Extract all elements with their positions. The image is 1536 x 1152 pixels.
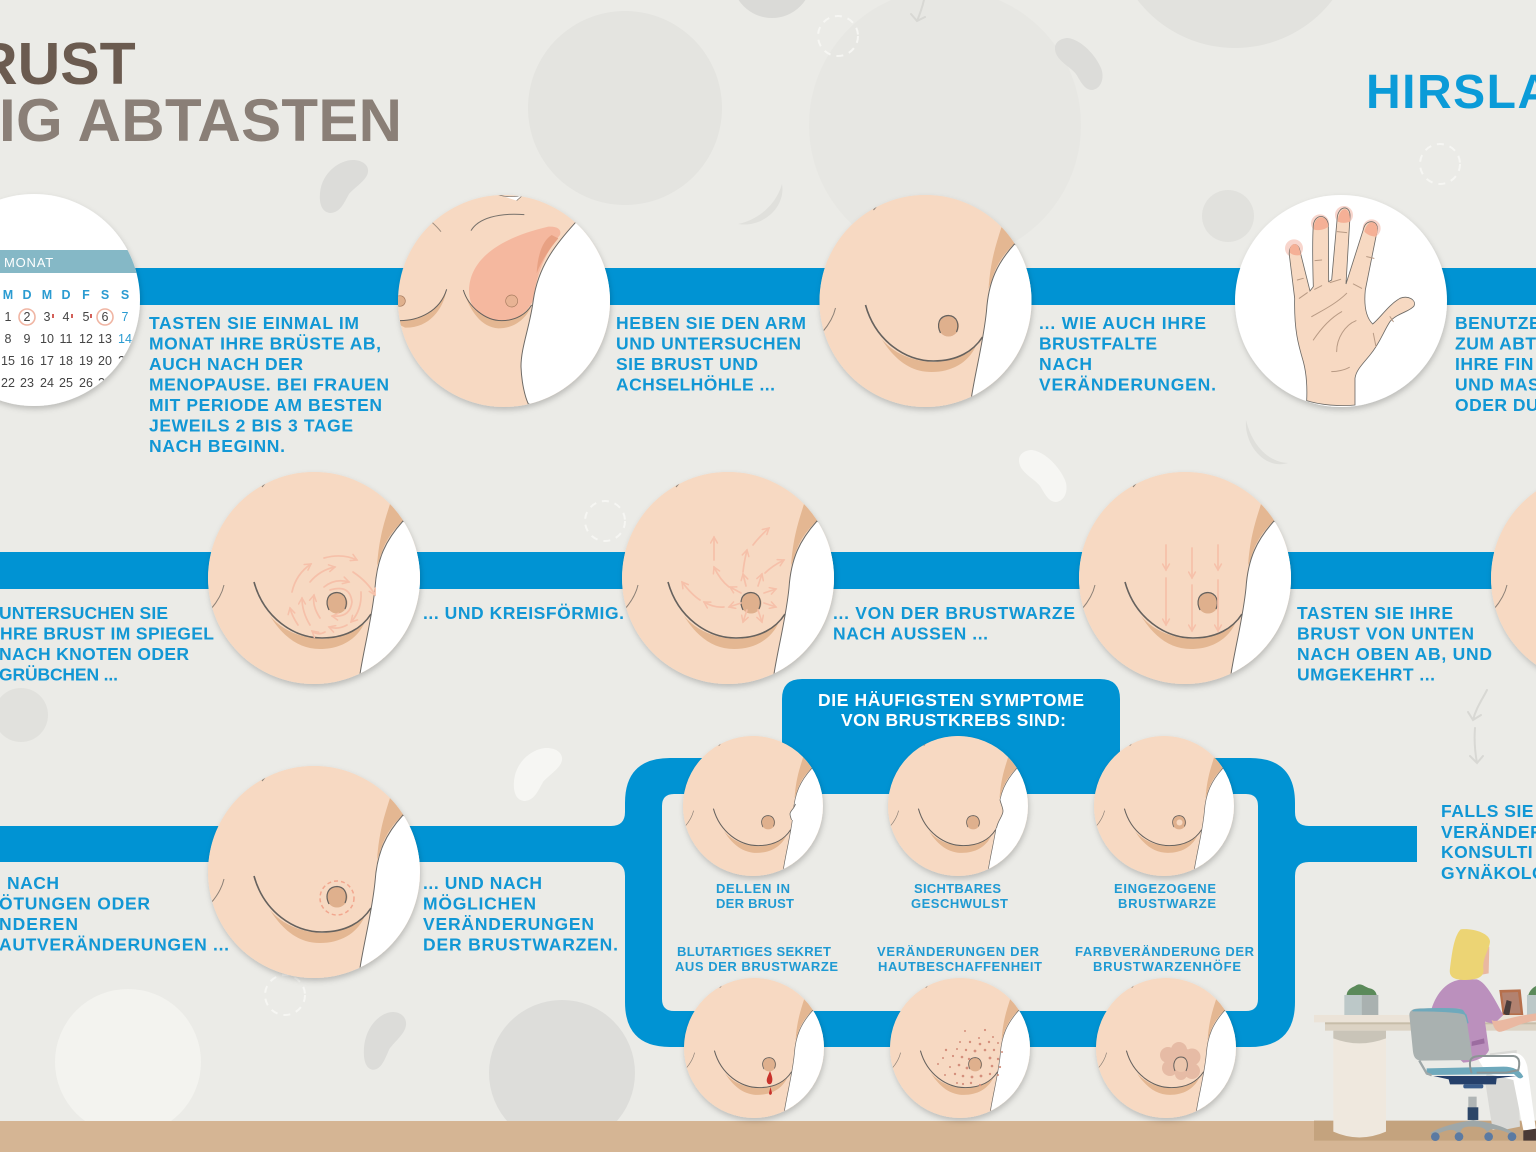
frame heading: VON BRUSTKREBS SIND:: [841, 710, 1066, 730]
step: calendar: S: [121, 288, 129, 302]
step text: once a month: JEWEILS 2 BIS 3 TAGE: [149, 416, 353, 436]
woman: [1432, 929, 1536, 1141]
step: calendar: 2: [24, 310, 31, 324]
step: calendar: 13: [98, 332, 112, 346]
step text: once a month: MIT PERIODE AM BESTEN: [149, 395, 382, 415]
step text: breast fold: [1039, 313, 1216, 394]
symptom label: skin texture: HAUTBESCHAFFENHEIT: [878, 959, 1042, 974]
step: calendar: 14: [118, 332, 132, 346]
step: calendar: 7: [122, 310, 129, 324]
step text: mirror check: UNTERSUCHEN SIE: [0, 603, 168, 623]
step: calendar: 26: [79, 376, 93, 390]
step text: use fingers: [1455, 313, 1536, 415]
symptom label: areola colour: [1075, 944, 1255, 974]
symptom label: skin texture: VERÄNDERUNGEN DER: [877, 944, 1040, 959]
symptom label: skin texture: [877, 944, 1042, 974]
step: calendar: 22: [1, 376, 15, 390]
step: hand illustration: [1235, 195, 1447, 407]
step text: nipple changes: MÖGLICHEN: [423, 894, 536, 914]
symptom: inverted nipple: [1094, 736, 1250, 885]
step: calendar: 15: [1, 354, 15, 368]
step text: consult gynaecologist: KONSULTI: [1441, 842, 1533, 862]
second plant: [1527, 986, 1536, 1015]
step: calendar: 21: [118, 354, 132, 368]
step: calendar: 4: [63, 310, 70, 324]
step text: raise arm: HEBEN SIE DEN ARM: [616, 313, 806, 333]
frame heading: DIE HÄUFIGSTEN SYMPTOME: [818, 690, 1084, 710]
symptom: visible lump: [888, 736, 1044, 885]
step: calendar: MONAT: [4, 255, 54, 270]
step text: once a month: MONAT IHRE BRÜSTE AB,: [149, 334, 381, 354]
step text: nipple changes: [423, 873, 618, 954]
symptom label: areola colour: BRUSTWARZENHÖFE: [1093, 959, 1241, 974]
step text: nipple changes: VERÄNDERUNGEN: [423, 914, 594, 934]
step: breast fold illustration: [820, 195, 1056, 421]
symptom label: visible lump: GESCHWULST: [911, 896, 1008, 911]
step text: skin changes: ÖTUNGEN ODER: [0, 894, 150, 914]
step: calendar: 5: [83, 310, 90, 324]
step text: breast fold: NACH: [1039, 354, 1092, 374]
step: calendar: 11: [60, 332, 73, 346]
step text: raise arm: [616, 313, 806, 394]
step text: breast fold: ... WIE AUCH IHRE: [1039, 313, 1206, 333]
skin spots: [937, 1029, 1003, 1086]
symptom: dimples: [683, 736, 839, 885]
step text: once a month: TASTEN SIE EINMAL IM: [149, 313, 359, 333]
step: calendar: 24: [40, 376, 54, 390]
symptom label: bloody discharge: AUS DER BRUSTWARZE: [675, 959, 838, 974]
circular arrows: [290, 556, 375, 634]
step text: breast fold: VERÄNDERUNGEN.: [1039, 374, 1216, 394]
step text: use fingers: ZUM ABT: [1455, 334, 1536, 354]
step: circular motion illustration: [208, 472, 444, 698]
step: calendar: 3: [44, 310, 51, 324]
step text: skin changes: NDEREN: [0, 914, 78, 934]
symptom: skin texture: [890, 978, 1046, 1127]
title: IG ABTASTEN: [0, 87, 402, 154]
symptom: areola colour: [1096, 978, 1252, 1127]
step: calendar: 27: [98, 376, 112, 390]
step text: mirror check: NACH KNOTEN ODER: [0, 644, 189, 664]
step: calendar: 17: [40, 354, 54, 368]
step text: use fingers: IHRE FIN: [1455, 354, 1534, 374]
step: calendar: 18: [59, 354, 73, 368]
step: calendar: 1: [5, 310, 12, 324]
step text: circular: ... UND KREISFÖRMIG.: [423, 603, 624, 623]
step text: mirror check: HRE BRUST IM SPIEGEL: [0, 624, 214, 644]
step text: consult gynaecologist: FALLS SIE: [1441, 801, 1534, 821]
step: cropped next illustration: [1491, 472, 1536, 698]
step: raised arm illustration: [396, 195, 614, 412]
frame heading: [818, 690, 1084, 730]
office chair: [1409, 1008, 1523, 1141]
step: calendar: 20: [98, 354, 112, 368]
photo frame: [1499, 989, 1523, 1015]
title: [0, 31, 402, 154]
step text: bottom to top: UMGEKEHRT ...: [1297, 664, 1435, 684]
step text: raise arm: SIE BRUST UND: [616, 354, 758, 374]
step text: nipple changes: ... UND NACH: [423, 873, 542, 893]
symptom label: bloody discharge: [675, 944, 838, 974]
symptom label: dimples: DER BRUST: [716, 896, 794, 911]
desk: [1314, 1015, 1536, 1137]
symptom frame: [611, 679, 1309, 1047]
symptom label: dimples: DELLEN IN: [716, 881, 790, 896]
connector bar: row 1: [120, 268, 1536, 305]
symptom label: inverted nipple: BRUSTWARZE: [1118, 896, 1216, 911]
step text: once a month: NACH BEGINN.: [149, 436, 285, 456]
radial arrows: [682, 528, 784, 622]
step: radial motion illustration: [622, 472, 858, 698]
step text: skin changes: NACH: [7, 873, 59, 893]
step text: raise arm: UND UNTERSUCHEN: [616, 334, 801, 354]
vertical arrows: [1166, 545, 1218, 631]
step text: once a month: [149, 313, 389, 456]
step: calendar: 12: [79, 332, 93, 346]
symptom: bloody discharge: [684, 978, 840, 1127]
plant: [1344, 984, 1378, 1015]
symptom label: inverted nipple: [1114, 881, 1216, 911]
step text: breast fold: BRUSTFALTE: [1039, 334, 1157, 354]
connector bar: row 3: [0, 826, 630, 862]
step text: raise arm: ACHSELHÖHLE ...: [616, 374, 775, 394]
step: calendar: 6: [102, 310, 109, 324]
connector bar: row 2: [0, 552, 1536, 589]
step: calendar: D: [22, 288, 32, 302]
connector bar: row 3 right: [1290, 826, 1417, 862]
step text: once a month: AUCH NACH DER: [149, 354, 303, 374]
symptom label: inverted nipple: EINGEZOGENE: [1114, 881, 1216, 896]
step text: once a month: MENOPAUSE. BEI FRAUEN: [149, 374, 389, 394]
step text: bottom to top: TASTEN SIE IHRE: [1297, 603, 1453, 623]
step: calendar: M: [42, 288, 52, 302]
step text: skin changes: AUTVERÄNDERUNGEN ...: [0, 934, 229, 954]
floor rug: [1314, 1121, 1536, 1141]
symptom label: bloody discharge: BLUTARTIGES SEKRET: [677, 944, 831, 959]
step text: bottom to top: BRUST VON UNTEN: [1297, 624, 1474, 644]
symptom label: areola colour: FARBVERÄNDERUNG DER: [1075, 944, 1255, 959]
step: calendar: S: [101, 288, 109, 302]
step: vertical motion illustration: [1079, 472, 1315, 698]
step: calendar: 25: [59, 376, 73, 390]
symptom label: visible lump: [911, 881, 1008, 911]
floor: [0, 1121, 1536, 1152]
step text: skin changes: [0, 873, 229, 954]
step: calendar: M: [3, 288, 13, 302]
symptom label: dimples: [716, 881, 794, 911]
step: calendar: 9: [24, 332, 31, 346]
step: calendar: D: [61, 288, 71, 302]
step text: outward: NACH AUSSEN ...: [833, 624, 988, 644]
step text: bottom to top: [1297, 603, 1492, 684]
desk scene with woman: [1314, 929, 1536, 1141]
step: calendar: 10: [40, 332, 54, 346]
step: calendar: 19: [79, 354, 93, 368]
step text: outward: ... VON DER BRUSTWARZE: [833, 603, 1075, 623]
step: calendar: 8: [5, 332, 12, 346]
step: calendar: [0, 194, 150, 406]
step text: mirror check: [0, 603, 214, 684]
step text: outward: [833, 603, 1075, 644]
step: nipple check illustration: [208, 766, 444, 992]
step: calendar: 23: [20, 376, 34, 390]
step text: nipple changes: DER BRUSTWARZEN.: [423, 934, 618, 954]
discoloured areola: [1160, 1042, 1200, 1080]
step: calendar: F: [82, 288, 90, 302]
step: calendar: 16: [20, 354, 34, 368]
step text: consult gynaecologist: [1441, 801, 1536, 883]
dashed ring: [320, 881, 354, 915]
step text: mirror check: GRÜBCHEN ...: [0, 664, 118, 684]
step text: bottom to top: NACH OBEN AB, UND: [1297, 644, 1492, 664]
symptom label: visible lump: SICHTBARES: [914, 881, 1001, 896]
